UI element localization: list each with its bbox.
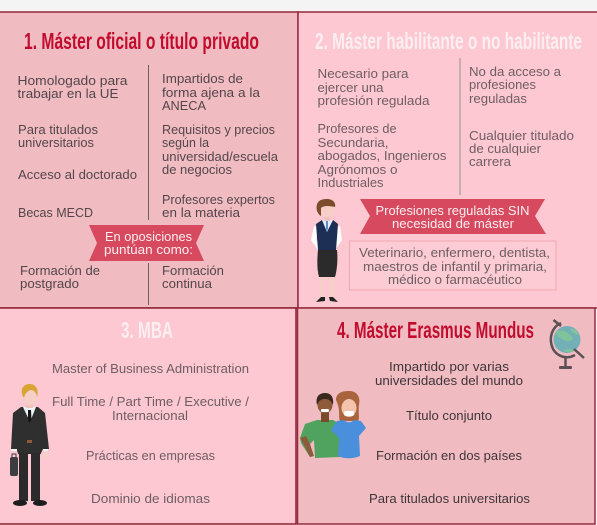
ribbon: profesiones reguladas sin máster: Profesiones reguladas SIN bbox=[376, 203, 530, 218]
panel 2 left column bbox=[318, 66, 447, 190]
icon: globe bbox=[551, 320, 584, 369]
panel 1 lower columns: Formación bbox=[162, 263, 224, 278]
panel 2 left column: ejercer una bbox=[318, 80, 384, 95]
ribbon: profesiones reguladas sin máster: necesidad de máster bbox=[392, 216, 515, 231]
panel 2 left column: Agrónomos o bbox=[318, 162, 398, 177]
panel 1 left column bbox=[18, 73, 137, 220]
panel 1 lower columns: Formación de bbox=[20, 263, 100, 278]
panel 1 right column: según la bbox=[162, 135, 210, 150]
panel 3 heading: 3. MBA bbox=[121, 317, 173, 343]
panel 1 left column: trabajar en la UE bbox=[18, 86, 119, 101]
icon: woman in uniform bbox=[311, 199, 342, 302]
panel 1 right column: universidad/escuela bbox=[162, 149, 279, 164]
panel 2 left column: Secundaria, bbox=[318, 135, 388, 150]
panel 1 left column: Para titulados bbox=[18, 122, 98, 137]
panel 1 right column: ANECA bbox=[162, 98, 206, 113]
panel 3 items: Master of Business Administration bbox=[52, 361, 249, 376]
ribbon: en oposiciones puntúan como: puntúan como: bbox=[104, 242, 193, 257]
panel 1 right column: forma ajena a la bbox=[162, 85, 261, 100]
panel 3 items: Internacional bbox=[112, 408, 188, 423]
panel 1 right column: Requisitos y precios bbox=[162, 122, 275, 137]
box: profesiones sin máster bbox=[350, 241, 556, 290]
panel 3 items bbox=[52, 361, 249, 506]
panel 3 items: Full Time / Part Time / Executive / bbox=[52, 394, 249, 409]
icon: two students bbox=[300, 391, 366, 458]
panel 3 items: Dominio de idiomas bbox=[91, 491, 211, 506]
panel 4 items: Título conjunto bbox=[406, 408, 492, 423]
panel 1 left column: Becas MECD bbox=[18, 205, 93, 220]
panel 4 items bbox=[369, 359, 530, 506]
ribbon: en oposiciones puntúan como bbox=[89, 225, 204, 261]
ribbon: en oposiciones puntúan como: En oposiciones bbox=[105, 229, 192, 244]
panel 3 items: Prácticas en empresas bbox=[86, 448, 215, 463]
box: profesiones sin máster: Veterinario, enfermero, dentista, bbox=[359, 245, 550, 260]
panel 1 right column: de negocios bbox=[162, 162, 232, 177]
panel 2 right column: profesiones bbox=[469, 77, 536, 92]
panel 1 left column: Acceso al doctorado bbox=[18, 167, 137, 182]
panel 4 items: Impartido por varias bbox=[389, 359, 510, 374]
panel 2 left column: Necesario para bbox=[318, 66, 409, 81]
ribbon: profesiones reguladas sin máster bbox=[360, 199, 546, 234]
panel 2 right column: reguladas bbox=[469, 91, 527, 106]
icon: businessman with briefcase bbox=[10, 384, 49, 506]
panel 1 lower columns: continua bbox=[162, 276, 213, 291]
panel 2 right column: Cualquier titulado bbox=[469, 128, 574, 143]
panel 1 right column: en la materia bbox=[162, 205, 241, 220]
panel 1 heading: 1. Máster oficial o título privado bbox=[24, 28, 259, 54]
panel 1 left column: Homologado para bbox=[18, 73, 128, 88]
panel 2 column divider bbox=[459, 58, 461, 195]
panel 2 right column: de cualquier bbox=[469, 141, 542, 156]
panel 2 left column: abogados, Ingenieros bbox=[318, 148, 447, 163]
panel 4 items: universidades del mundo bbox=[375, 373, 523, 388]
panel 2 right column: carrera bbox=[469, 154, 512, 169]
panel 2 left column: Profesores de bbox=[318, 121, 396, 136]
panel 1 lower columns bbox=[20, 263, 224, 291]
panel 2 left column: profesión regulada bbox=[318, 93, 430, 108]
panel 1 left column: universitarios bbox=[18, 135, 94, 150]
box: profesiones sin máster: médico o farmacéutico bbox=[388, 272, 522, 287]
panel 1 right column: Impartidos de bbox=[162, 71, 243, 86]
panel 4 items: Formación en dos países bbox=[376, 448, 522, 463]
panel 2: máster habilitante o no habilitante bbox=[298, 12, 597, 308]
panel 1 right column: Profesores expertos bbox=[162, 192, 275, 207]
panel 2 right column: No da acceso a bbox=[469, 64, 562, 79]
panel 1 right column bbox=[162, 71, 279, 220]
panel 4: máster Erasmus Mundus bbox=[298, 308, 595, 524]
panel 1: máster oficial o título privado bbox=[0, 12, 298, 308]
panel 1 column divider bbox=[148, 65, 150, 220]
panel 2 right column bbox=[469, 64, 574, 169]
panel 1 lower divider bbox=[148, 263, 150, 305]
box: profesiones sin máster: maestros de infantil y primaria, bbox=[363, 259, 547, 274]
panel 2 left column: Industriales bbox=[318, 175, 384, 190]
panel 4 items: Para titulados universitarios bbox=[369, 491, 530, 506]
panel 1 lower columns: postgrado bbox=[20, 276, 79, 291]
panel 3: MBA bbox=[0, 308, 296, 524]
